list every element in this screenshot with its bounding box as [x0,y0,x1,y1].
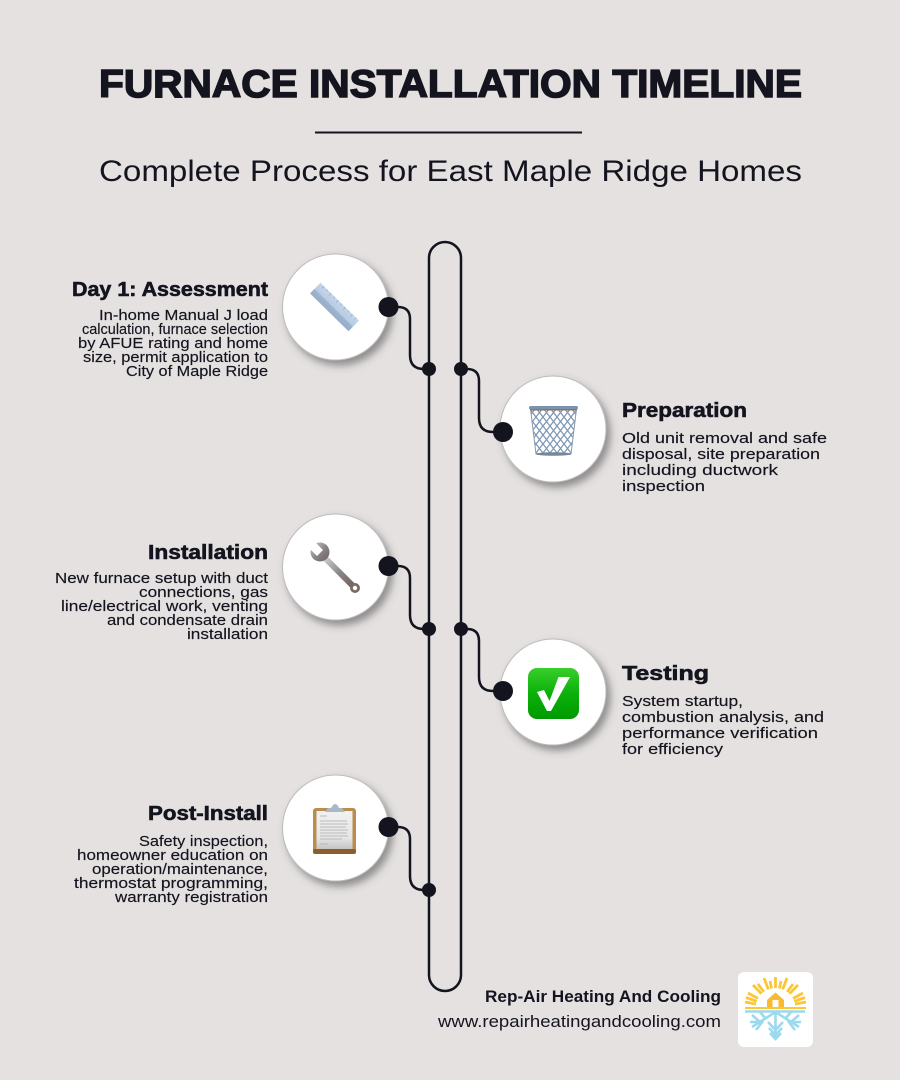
footer: website: www.repairheatingandcooling.com [437,1012,721,1031]
icon: wastebasket [529,406,578,456]
subtitle: Complete Process for East Maple Ridge Homes [99,155,802,188]
text: installation: installation [187,627,268,643]
text: day 1: size, permit application to [83,350,268,366]
icon: clipboard [313,804,356,854]
heading: testing: Testing [622,662,709,685]
panel: installation [55,514,398,643]
circle: installation [282,514,388,620]
text: post-install: homeowner education on [77,848,268,864]
icon: ruler [310,283,359,331]
connector: day 1 [389,307,436,376]
circle: testing [500,639,606,745]
text: post-install [74,834,268,906]
connector: installation [389,566,436,636]
icon: wrench [309,542,360,593]
heading: post-install: Post-Install [148,802,268,825]
text: testing: System startup, [622,694,743,710]
text: post-install: Safety inspection, [139,834,268,850]
text: testing [622,694,824,758]
text: day 1 [78,308,268,380]
heading: installation: Installation [148,541,268,564]
text: post-install: warranty registration [114,890,268,906]
text: installation: and condensate drain [107,613,268,629]
panel: preparation [493,376,827,495]
connector: post-install [389,827,436,897]
text: day 1: City of Maple Ridge [126,364,268,380]
text: installation: line/electrical work, venting [61,599,268,615]
timeline track [429,242,461,991]
text: testing: for efficiency [622,742,724,758]
text: day 1: calculation, furnace selection [82,322,268,338]
heading: day 1: Day 1: Assessment [72,278,268,301]
title: FURNACE INSTALLATION TIMELINE [99,63,802,106]
text: testing: performance verification [622,726,818,742]
text: testing: combustion analysis, and [622,710,824,726]
footer: company name: Rep-Air Heating And Cooling [485,988,721,1006]
circle: assessment [282,254,388,360]
text: preparation: inspection [622,479,705,495]
text: day 1: In-home Manual J load [99,308,268,324]
circle: preparation [500,376,606,482]
panel: day 1 assessment [72,254,398,380]
logo: sun [744,977,806,1007]
text: preparation: including ductwork [622,463,779,479]
text: post-install: thermostat programming, [74,876,268,892]
logo: snowflake [745,1011,805,1040]
panel: post-install [74,775,398,906]
text: post-install: operation/maintenance, [92,862,268,878]
circle: post-install [282,775,388,881]
text: preparation: Old unit removal and safe [622,431,827,447]
text: preparation [622,431,827,495]
logo [738,972,813,1047]
text: installation: connections, gas [139,585,268,601]
heading: preparation: Preparation [622,399,747,422]
text: installation: New furnace setup with duct [55,571,268,587]
connector: preparation [454,362,503,432]
connector: testing [454,622,503,691]
panel: testing [493,639,824,758]
text: installation [55,571,268,643]
text: day 1: by AFUE rating and home [78,336,268,352]
text: preparation: disposal, site preparation [622,447,820,463]
icon: check mark [528,668,579,719]
